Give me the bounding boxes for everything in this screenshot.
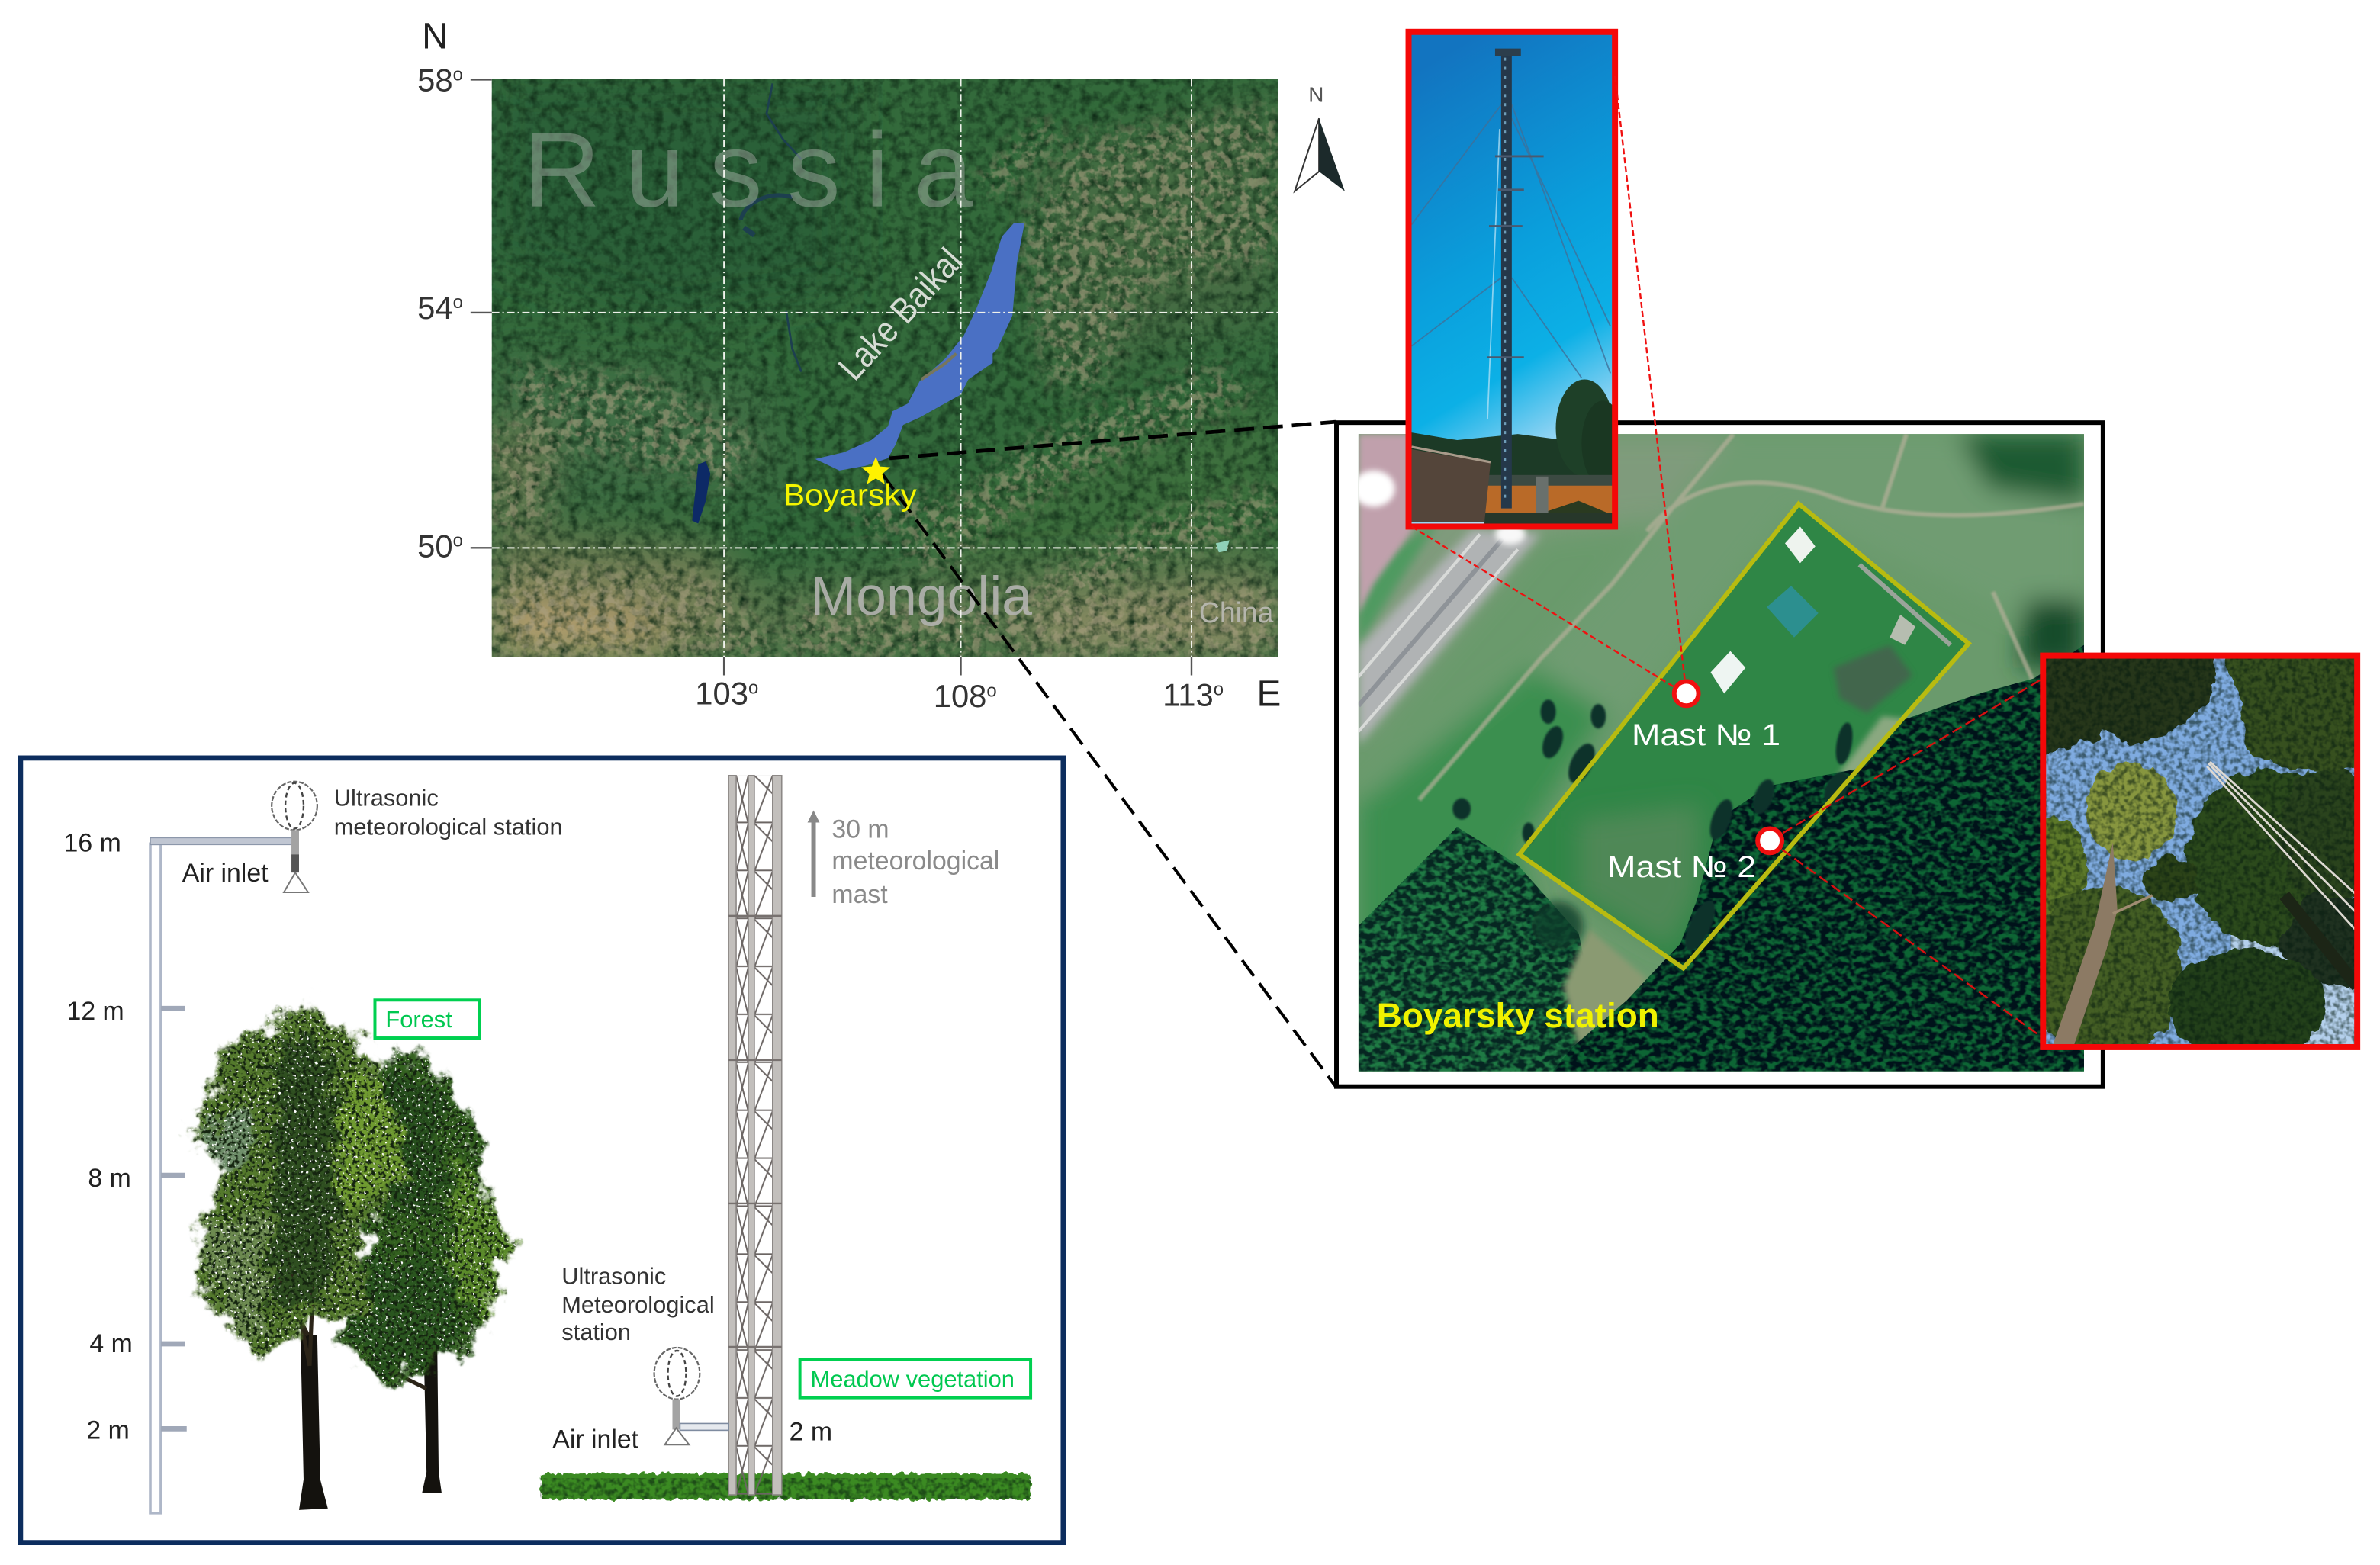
graticule — [492, 79, 1278, 657]
axis ticks — [471, 79, 1192, 675]
height label: 16 m: 16 m — [64, 828, 121, 857]
small lake — [1216, 540, 1230, 552]
label: mast 1: Mast № 1 — [1632, 718, 1780, 752]
lake: Baikal — [815, 223, 1024, 471]
label: China: China — [1199, 597, 1274, 629]
label: ultrasonic station: Ultrasonic — [334, 785, 439, 811]
label: air inlet meadow: Air inlet — [552, 1425, 639, 1454]
trunks — [299, 1335, 328, 1510]
label: 30 m mast: meteorological — [831, 847, 999, 876]
individual trees — [1452, 699, 1855, 955]
icon: height arrow — [808, 811, 819, 897]
photo: forest canopy mast 2 — [2018, 638, 2380, 1059]
mountain ridges — [492, 106, 1278, 657]
left verge — [1358, 529, 1437, 641]
icon: ultrasonic station at 16 m — [272, 782, 317, 892]
label: Forest — [375, 1000, 480, 1038]
axis label: 103: o — [748, 677, 758, 698]
bottom canopy — [2167, 950, 2325, 1059]
height label: 12 m: 12 m — [67, 997, 124, 1026]
label: Boyarsky station: Boyarsky station — [1377, 996, 1659, 1035]
crowns — [195, 1004, 509, 1389]
axis label: 108: 108 — [934, 678, 986, 714]
panel: measurement setup — [21, 758, 1063, 1543]
axis label: 113: 113 — [1163, 676, 1214, 712]
axis label: 50: o — [453, 530, 463, 551]
dirt tracks — [1419, 434, 2084, 800]
panel: regional satellite map — [471, 79, 1278, 675]
label: mast 2: Mast № 2 — [1607, 850, 1756, 884]
axis label: 50: 50 — [417, 528, 453, 564]
road — [1359, 529, 1541, 745]
height label: 8 m: 8 m — [88, 1164, 131, 1193]
top canopy — [2018, 638, 2219, 759]
mast seen from below — [2207, 762, 2357, 932]
label: ultrasonic station: meteorological station — [334, 813, 563, 840]
axis label: 103: 103 — [695, 675, 748, 711]
right tree — [2187, 770, 2357, 946]
axis label: east: E — [1257, 673, 1281, 714]
height label: 2 m: 2 m — [86, 1416, 130, 1444]
icon: Boyarsky star — [861, 457, 890, 484]
marker: mast 1 — [1674, 681, 1699, 705]
lake: Khovsgol — [692, 461, 710, 523]
label: ultrasonic station meadow: Meteorological — [561, 1291, 715, 1318]
label: Meadow vegetation: Meadow vegetation — [811, 1366, 1015, 1393]
callout lines: mast 1 — [1412, 76, 1687, 693]
icon: ultrasonic station at 2 m — [654, 1348, 728, 1444]
height label: 4 m: 4 m — [89, 1329, 133, 1358]
connector: Boyarsky to inset bottom — [882, 474, 1336, 1087]
label: Meadow vegetation — [800, 1360, 1031, 1398]
label: Mongolia: Mongolia — [811, 566, 1032, 627]
label: 30 m mast: mast — [831, 880, 888, 909]
lattice tower — [1501, 52, 1512, 509]
cabin — [1412, 449, 1491, 522]
axis label: 58: o — [453, 64, 463, 85]
icon: north arrow: N — [1308, 82, 1323, 106]
label: Forest: Forest — [385, 1006, 452, 1033]
connector: Boyarsky to inset top — [889, 422, 1336, 458]
axis label: 58: 58 — [417, 62, 453, 98]
icon: north arrow — [1295, 82, 1345, 191]
frame: station inset — [1336, 423, 2103, 1087]
label: air inlet forest: Air inlet — [182, 859, 269, 888]
built-up area — [1359, 434, 1412, 615]
left tree — [2018, 817, 2086, 920]
panel: station satellite image — [1352, 434, 2084, 1072]
illustration: lattice mast — [728, 776, 782, 1495]
rivers and reservoirs — [741, 83, 802, 372]
illustration: meadow grass — [540, 1473, 1031, 1499]
tree line — [1412, 410, 1615, 489]
label: Lake Baikal: Lake Baikal — [831, 241, 970, 388]
label: ultrasonic station meadow: station — [561, 1319, 631, 1345]
axis label: 54: 54 — [417, 290, 453, 326]
lower-left woodland — [1359, 827, 1609, 1072]
trunk — [2052, 842, 2118, 1047]
meadow inside compound — [1520, 504, 1969, 968]
label: Boyarsky: Boyarsky — [783, 479, 917, 513]
label: 30 m mast: 30 m — [831, 815, 889, 844]
label: ultrasonic station meadow: Ultrasonic — [561, 1262, 666, 1289]
axis label: 113: o — [1214, 679, 1224, 699]
photo: tower mast 1 — [1409, 32, 1624, 526]
buildings — [1710, 651, 1745, 693]
station boundary — [1520, 504, 1969, 968]
forest mast — [150, 837, 294, 1513]
axis label: 108: o — [986, 680, 997, 701]
label: Russia: Russia — [523, 111, 973, 230]
axis label: north: N — [422, 17, 449, 57]
callout lines: mast 2 — [1770, 678, 2043, 1038]
axis label: 54: o — [453, 292, 463, 313]
illustration: trees — [195, 1004, 509, 1510]
label: 2 m mast: 2 m — [790, 1417, 832, 1446]
marker: mast 2 — [1758, 828, 1782, 853]
forest — [1553, 645, 2084, 1072]
